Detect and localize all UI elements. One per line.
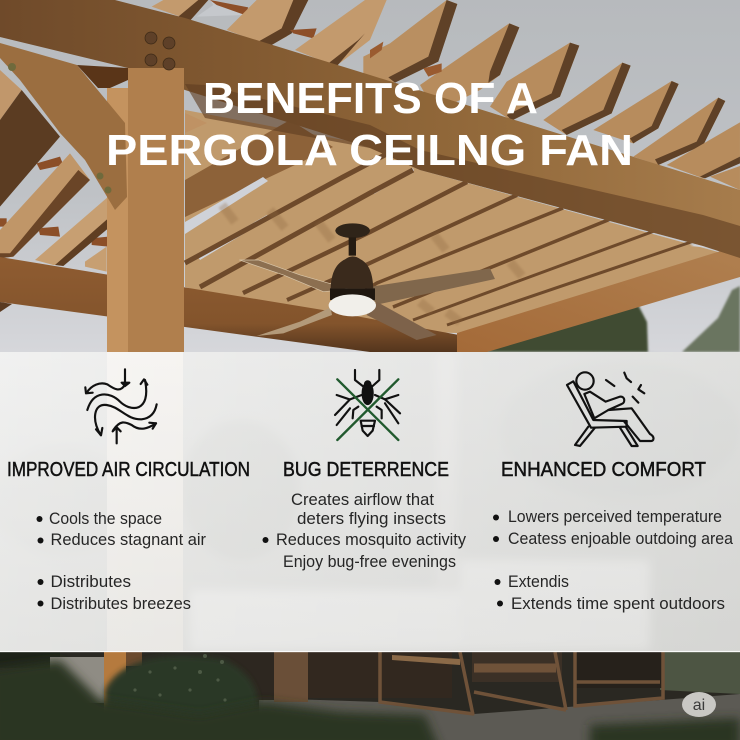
green cross (337, 379, 398, 440)
heading: BUG DETERRENCE (283, 459, 449, 481)
fan blade: left (239, 260, 350, 292)
text lines (262, 491, 467, 571)
background trees (470, 270, 740, 352)
panel lower edge (0, 651, 740, 652)
fan light (329, 288, 376, 316)
left rafters and brace backdrop (0, 70, 108, 272)
main beam (0, 0, 740, 258)
text lines: Enjoy bug-free evenings (283, 553, 456, 571)
bullets: Ceatess enjoable outdoing area (508, 530, 734, 548)
brace (0, 43, 127, 210)
bullets: Distributes breezes (50, 595, 191, 613)
text lines: deters flying insects (297, 510, 446, 528)
lower scene behind the panel (0, 352, 740, 652)
sky background (0, 0, 740, 352)
icon: crossed-out bug (335, 370, 400, 440)
lower beams (0, 245, 740, 352)
column: enhanced comfort (493, 459, 734, 613)
text lines: Reduces mosquito activity (276, 531, 467, 549)
column: bug deterrence (262, 459, 467, 571)
icon: air circulation (85, 369, 157, 443)
bottom scene (0, 652, 740, 740)
bullets: Distributes (50, 573, 131, 591)
ai badge (682, 692, 716, 717)
bullets: Extends time spent outdoors (511, 595, 725, 613)
bullets (493, 508, 734, 613)
ceiling fan (239, 223, 495, 340)
bullets: Lowers perceived temperature (508, 508, 722, 526)
translucent benefits panel (0, 352, 740, 652)
bullets (36, 510, 206, 613)
fan blade: right (367, 268, 495, 304)
shadow behind brace (77, 65, 128, 88)
icon: person relaxing (567, 372, 653, 446)
rafters under the main beam (185, 110, 740, 333)
title: BENEFITS OF A (203, 74, 538, 123)
fan blade: lower left (257, 307, 332, 336)
title (106, 74, 633, 175)
fan canopy (335, 223, 370, 238)
bug (335, 370, 400, 436)
heading: IMPROVED AIR CIRCULATION (7, 459, 250, 481)
post (107, 68, 184, 352)
fan blade: lower right (367, 302, 437, 340)
title: PERGOLA CEILNG FAN (106, 126, 633, 175)
bullets: Extendis (508, 573, 569, 591)
beam plate bolts (145, 32, 175, 70)
fan down rod (349, 237, 356, 256)
brace bolts (8, 63, 112, 194)
ai badge: ai (693, 697, 705, 714)
upper rafters left of title (152, 0, 387, 66)
heading: ENHANCED COMFORT (501, 459, 706, 481)
panel shading (0, 352, 740, 652)
column: improved air circulation (7, 459, 250, 613)
upper rafters right of title (363, 0, 740, 190)
main beam underside (185, 84, 740, 258)
text lines: Creates airflow that (291, 491, 434, 509)
bullets: Reduces stagnant air (50, 531, 206, 549)
bullets: Cools the space (49, 510, 162, 528)
fan motor housing (331, 256, 373, 288)
